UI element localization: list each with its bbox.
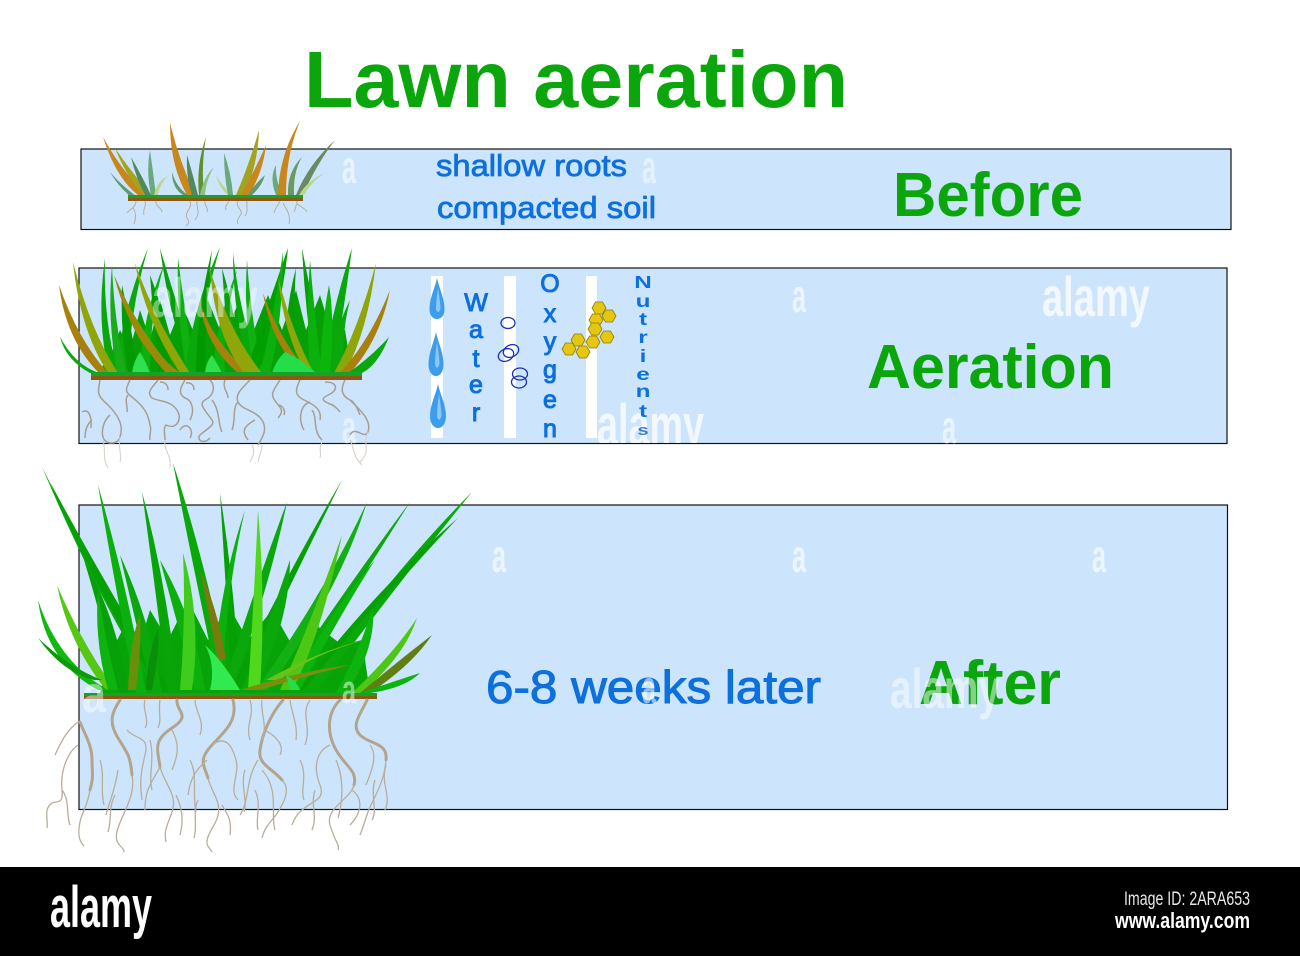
label: nutrients: r <box>638 327 648 347</box>
fine roots: after <box>47 700 387 852</box>
label: oxygen: y <box>544 328 557 356</box>
label: water: r <box>472 399 480 427</box>
panel: before <box>81 148 1231 230</box>
label: water: t <box>473 345 480 373</box>
soil channel: nutrients <box>586 276 597 438</box>
footer: website: www.alamy.com <box>1114 908 1250 933</box>
stock-photo watermarks: a <box>792 530 806 582</box>
overlay watermarks on grass: a <box>342 668 356 712</box>
label: oxygen: n <box>543 415 557 443</box>
label: oxygen: g <box>543 356 557 384</box>
label: nutrients: n <box>636 381 650 401</box>
footer bar <box>0 867 1300 956</box>
footer logo: alamy: alamy <box>50 875 152 940</box>
stock-photo watermarks: alamy <box>1042 265 1150 328</box>
icon: water drops <box>428 278 446 428</box>
roots: before <box>127 201 307 226</box>
label: oxygen: e <box>543 386 557 414</box>
stock-photo watermarks: alamy <box>890 657 1000 720</box>
heading: after: After <box>919 649 1061 718</box>
icon: oxygen bubbles <box>496 318 528 388</box>
label: oxygen: O <box>540 270 560 298</box>
stock-photo watermarks: a <box>642 141 656 193</box>
root tips below the aeration panel <box>103 432 368 468</box>
text: 6-8 weeks later: 6-8 weeks later <box>486 661 821 713</box>
text: compacted soil: compacted soil <box>437 190 656 225</box>
label: water: e <box>469 371 483 399</box>
illustration: dense grass after aeration <box>38 463 472 852</box>
icon: nutrient molecules <box>562 302 616 358</box>
label: oxygen: x <box>544 300 557 328</box>
text: shallow roots: shallow roots <box>436 148 627 183</box>
illustration: sparse grass before aeration <box>103 121 335 226</box>
illustration: grass during aeration <box>59 247 390 468</box>
stock-photo watermarks: a <box>642 661 656 713</box>
heading: before: Before <box>893 161 1083 230</box>
stock-photo watermarks: a <box>492 530 506 582</box>
panel: aeration <box>79 268 1227 444</box>
main roots: after <box>80 700 386 790</box>
stock-photo watermarks: alamy <box>597 393 704 458</box>
label: nutrients: N <box>634 272 652 292</box>
stock-photo watermarks: a <box>342 141 356 193</box>
footer: image id: Image ID: 2ARA653 <box>1124 889 1250 910</box>
diagram: water, oxygen and nutrients in soil channels <box>428 270 652 443</box>
overlay watermarks on grass: alamy <box>152 266 258 329</box>
stock-photo watermarks <box>342 141 1150 720</box>
label: nutrients: i <box>640 346 646 366</box>
stock-photo watermarks: a <box>342 401 356 453</box>
heading: aeration: Aeration <box>867 333 1114 402</box>
overlay watermarks on grass: a <box>82 666 107 724</box>
stock-photo watermarks: a <box>792 270 806 322</box>
ground strip: aeration <box>91 372 362 380</box>
panel: after <box>79 505 1228 810</box>
label: nutrients: s <box>637 422 649 438</box>
overlay watermarks on grass <box>82 266 356 724</box>
label: nutrients: e <box>636 364 650 384</box>
roots: aeration <box>82 380 369 445</box>
stock-photo watermarks: a <box>1092 530 1106 582</box>
soil channel: water <box>431 276 443 438</box>
ground strip: before <box>128 195 303 201</box>
label: nutrients: t <box>639 309 647 329</box>
stock-photo watermarks: a <box>942 401 956 453</box>
label: water: W <box>464 289 488 317</box>
title: Lawn aeration <box>304 35 848 124</box>
label: nutrients: u <box>636 291 650 311</box>
label: water: a <box>469 316 483 344</box>
label: nutrients <box>634 272 652 438</box>
soil channel: oxygen <box>504 276 516 438</box>
ground strip: after <box>84 693 377 699</box>
label: nutrients: t <box>639 401 647 421</box>
